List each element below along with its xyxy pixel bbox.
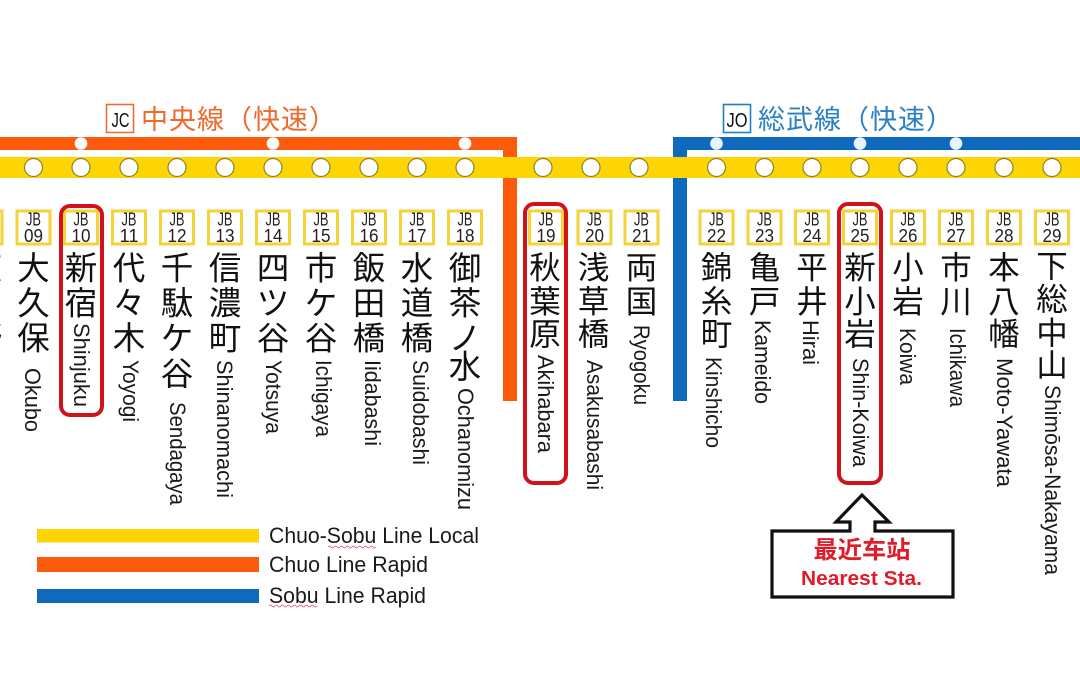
heading: Sobu Rapid line: JO (726, 110, 748, 132)
highlight: Shin-Koiwa (839, 204, 881, 483)
station JB16 Iidabashi: 飯 (353, 250, 385, 286)
station JB13 Shinanomachi: Shinanomachi (212, 360, 237, 498)
station JB14 Yotsuya: 四 (257, 250, 289, 286)
station JB19 Akihabara: JB (538, 210, 554, 230)
station JB25 Shin-Koiwa: Shin-Koiwa (848, 358, 873, 468)
station JB18 Ochanomizu: Ochanomizu (453, 388, 478, 510)
station JB14 Yotsuya: 14 (264, 226, 282, 246)
station JB10 Shinjuku: Shinjuku (69, 323, 94, 407)
station JB21 Ryogoku: JB (634, 210, 649, 230)
station JB17 Suidobashi (400, 210, 434, 465)
station JB20 Asakusabashi: 20 (585, 226, 604, 246)
station JB25 Shin-Koiwa (844, 210, 876, 468)
station JB26 Koiwa: 26 (898, 226, 918, 246)
station JB14 Yotsuya: ツ (257, 286, 289, 322)
station JB18 Ochanomizu: JB (458, 210, 472, 230)
station JB26 Koiwa: 岩 (892, 284, 924, 320)
station JB10 Shinjuku (64, 210, 98, 407)
station JB19 Akihabara: 19 (536, 226, 556, 246)
station JB12 Sendagaya: 駄 (161, 286, 193, 322)
station JB22 Kinshicho: 糸 (701, 284, 732, 320)
station JB20 Asakusabashi (578, 210, 611, 490)
station JB15 Ichigaya: 15 (312, 226, 330, 246)
station JB22 Kinshicho (700, 210, 733, 448)
station JB21 Ryogoku (625, 210, 658, 405)
station JB12 Sendagaya: JB (170, 210, 184, 230)
station JB28 Moto-Yawata: 幡 (988, 316, 1020, 352)
station JB20 Asakusabashi: JB (587, 210, 602, 230)
station JB27 Ichikawa: 川 (940, 284, 972, 320)
station JB23 Kameido: Kameido (750, 320, 775, 404)
station JB22 Kinshicho: 22 (707, 226, 726, 246)
station JB18 Ochanomizu: 水 (449, 349, 481, 385)
station JB24 Hirai (796, 210, 828, 365)
station JB17 Suidobashi: 橋 (401, 320, 433, 356)
station JB19 Akihabara: 秋 (529, 250, 561, 286)
heading: Sobu Rapid line: 総武線（快速） (758, 105, 954, 135)
station JB21 Ryogoku: 両 (626, 250, 657, 286)
station JB17 Suidobashi: Suidobashi (408, 360, 433, 465)
station JB17 Suidobashi: JB (410, 210, 424, 230)
station JB20 Asakusabashi: 橋 (578, 316, 609, 352)
legend: Sobu Line Rapid (37, 583, 426, 608)
station JB20 Asakusabashi: Asakusabashi (582, 360, 607, 490)
station JB28 Moto-Yawata: 本 (988, 250, 1020, 286)
station JB22 Kinshicho: Kinshicho (701, 357, 726, 448)
station JB14 Yotsuya: 谷 (257, 320, 289, 356)
station JB22 Kinshicho: 町 (701, 316, 732, 352)
station JB11 Yoyogi: JB (122, 210, 136, 230)
station JB13 Shinanomachi: 濃 (209, 286, 241, 322)
station JB16 Iidabashi: 橋 (353, 320, 385, 356)
station JB13 Shinanomachi: 13 (216, 226, 234, 246)
station JB29 Shimosa-Nakayama: 中 (1036, 315, 1068, 351)
station JB24 Hirai: 井 (796, 284, 828, 320)
station JB26 Koiwa: 小 (892, 250, 924, 286)
station JB15 Ichigaya: ケ (305, 286, 337, 322)
station JB09 Okubo: 久 (17, 286, 50, 322)
station JB25 Shin-Koiwa: 新 (844, 250, 876, 286)
station JB29 Shimosa-Nakayama: Shimōsa-Nakayama (1040, 385, 1065, 576)
station JB23 Kameido (748, 210, 781, 404)
station JB12 Sendagaya: ケ (161, 320, 193, 356)
station JB28 Moto-Yawata: 28 (994, 226, 1014, 246)
legend (37, 523, 479, 608)
station JB12 Sendagaya: 千 (161, 250, 193, 286)
station JB15 Ichigaya (304, 210, 338, 438)
station JB09 Okubo: Okubo (20, 368, 45, 432)
station JB09 Okubo (17, 210, 50, 432)
station JB28 Moto-Yawata: JB (996, 210, 1012, 230)
station JB26 Koiwa: JB (900, 210, 916, 230)
station JB29 Shimosa-Nakayama: 総 (1036, 281, 1068, 317)
callout text: Nearest Sta. (801, 568, 922, 590)
highlight: Shinjuku (61, 206, 102, 415)
station JB23 Kameido: JB (757, 210, 772, 230)
station JB18 Ochanomizu (448, 210, 482, 510)
station JB25 Shin-Koiwa: 25 (850, 226, 870, 246)
station JB19 Akihabara: Akihabara (533, 355, 558, 454)
station JB27 Ichikawa: 27 (946, 226, 966, 246)
station JB16 Iidabashi: JB (362, 210, 376, 230)
station JB28 Moto-Yawata (988, 210, 1020, 488)
station JB25 Shin-Koiwa: 小 (844, 284, 876, 320)
station JB18 Ochanomizu: 茶 (449, 286, 481, 322)
station JB12 Sendagaya: 谷 (161, 356, 193, 392)
station JB26 Koiwa (892, 210, 924, 386)
station JB23 Kameido: 23 (755, 226, 774, 246)
station JB25 Shin-Koiwa: 岩 (844, 316, 876, 352)
station JB09 Okubo: 09 (24, 226, 43, 246)
station JB11 Yoyogi: 11 (120, 226, 138, 246)
station JB08 (cut off) (0, 211, 2, 356)
station JB18 Ochanomizu: ノ (449, 320, 481, 356)
station JB19 Akihabara (529, 210, 562, 454)
station JB20 Asakusabashi: 草 (578, 284, 609, 320)
station JB15 Ichigaya: 市 (305, 250, 337, 286)
station JB11 Yoyogi: 々 (113, 286, 145, 322)
station JB21 Ryogoku: Ryogoku (629, 325, 654, 405)
station JB14 Yotsuya: JB (266, 210, 280, 230)
legend: Chuo Line Rapid (37, 552, 428, 577)
station JB13 Shinanomachi: 信 (209, 250, 241, 286)
station JB15 Ichigaya: 谷 (305, 320, 337, 356)
station JB09 Okubo: 保 (17, 320, 50, 356)
station JB29 Shimosa-Nakayama (1036, 210, 1068, 576)
station JB18 Ochanomizu: 18 (456, 226, 474, 246)
station JB12 Sendagaya (160, 210, 194, 506)
callout: nearest station (772, 495, 953, 597)
rapid line stops (75, 137, 962, 150)
station JB14 Yotsuya (256, 210, 290, 435)
station JB29 Shimosa-Nakayama: 下 (1036, 248, 1068, 284)
station JB13 Shinanomachi: 町 (209, 320, 241, 356)
station JB17 Suidobashi: 水 (401, 250, 433, 286)
station JB24 Hirai: 平 (796, 250, 828, 286)
station JB17 Suidobashi: 道 (401, 286, 433, 322)
station JB18 Ochanomizu: 御 (449, 250, 481, 286)
station JB29 Shimosa-Nakayama: 山 (1036, 347, 1068, 383)
legend: Sobu Line Rapid: Sobu Line Rapid (269, 583, 426, 608)
station JB28 Moto-Yawata: Moto-Yawata (992, 358, 1017, 488)
station JB10 Shinjuku: JB (74, 210, 88, 230)
legend: Chuo-Sobu Line Local: Chuo-Sobu Line Local (269, 523, 479, 548)
station JB16 Iidabashi (352, 210, 386, 446)
station JB11 Yoyogi: Yoyogi (118, 360, 143, 422)
station JB29 Shimosa-Nakayama: 29 (1042, 226, 1062, 246)
station JB24 Hirai: Hirai (798, 320, 823, 365)
station JB17 Suidobashi: 17 (408, 226, 426, 246)
local line stops (24, 158, 1061, 176)
station JB24 Hirai: JB (804, 210, 820, 230)
station JB28 Moto-Yawata: 八 (988, 284, 1020, 320)
station JB11 Yoyogi: 木 (113, 320, 145, 356)
station JB24 Hirai: 24 (802, 226, 822, 246)
station JB09 Okubo: 大 (17, 250, 50, 286)
station JB22 Kinshicho: JB (709, 210, 724, 230)
station JB21 Ryogoku: 国 (626, 284, 657, 320)
station JB16 Iidabashi: 田 (353, 286, 385, 322)
station JB10 Shinjuku: 宿 (65, 286, 97, 322)
station JB13 Shinanomachi (208, 210, 242, 498)
station JB19 Akihabara: 原 (529, 316, 561, 352)
station JB26 Koiwa: Koiwa (895, 328, 920, 386)
highlight: Akihabara (525, 204, 566, 483)
heading: Chuo Rapid line: 中央線（快速） (141, 105, 337, 135)
callout text (801, 537, 922, 590)
station JB10 Shinjuku: 10 (72, 226, 90, 246)
station JB27 Ichikawa: Ichikawa (945, 328, 970, 408)
station JB23 Kameido: 亀 (749, 250, 780, 286)
station JB13 Shinanomachi: JB (218, 210, 232, 230)
station JB16 Iidabashi: Iidabashi (360, 360, 385, 446)
station JB11 Yoyogi (112, 210, 146, 422)
station JB23 Kameido: 戸 (749, 284, 780, 320)
station JB12 Sendagaya: 12 (168, 226, 186, 246)
callout arrow and box outline (772, 495, 953, 597)
heading: Chuo Rapid line: JC (112, 110, 130, 132)
yellow Chuo-Sobu Local line (0, 157, 1080, 178)
station JB16 Iidabashi: 16 (360, 226, 378, 246)
station JB15 Ichigaya: JB (314, 210, 328, 230)
orange Chuo Rapid line (0, 137, 517, 401)
station JB14 Yotsuya: Yotsuya (261, 360, 286, 435)
station JB12 Sendagaya: Sendagaya (165, 402, 190, 506)
station JB19 Akihabara: 葉 (529, 284, 561, 320)
station JB27 Ichikawa: 市 (940, 250, 972, 286)
station JB10 Shinjuku: 新 (65, 250, 97, 286)
station JB22 Kinshicho: 錦 (701, 250, 732, 286)
station JB11 Yoyogi: 代 (113, 250, 145, 286)
station JB27 Ichikawa: JB (948, 210, 964, 230)
station JB29 Shimosa-Nakayama: JB (1044, 210, 1060, 230)
blue Sobu Rapid line (673, 137, 1080, 401)
station JB27 Ichikawa (940, 210, 972, 408)
station JB09 Okubo: JB (26, 210, 41, 230)
station JB15 Ichigaya: Ichigaya (311, 360, 336, 438)
station JB25 Shin-Koiwa: JB (852, 210, 868, 230)
station JB20 Asakusabashi: 浅 (578, 250, 609, 286)
legend: Chuo-Sobu Line Local (37, 523, 479, 548)
legend: Chuo Line Rapid: Chuo Line Rapid (269, 552, 428, 577)
station JB21 Ryogoku: 21 (632, 226, 651, 246)
callout text: 最近车站 (814, 537, 910, 564)
